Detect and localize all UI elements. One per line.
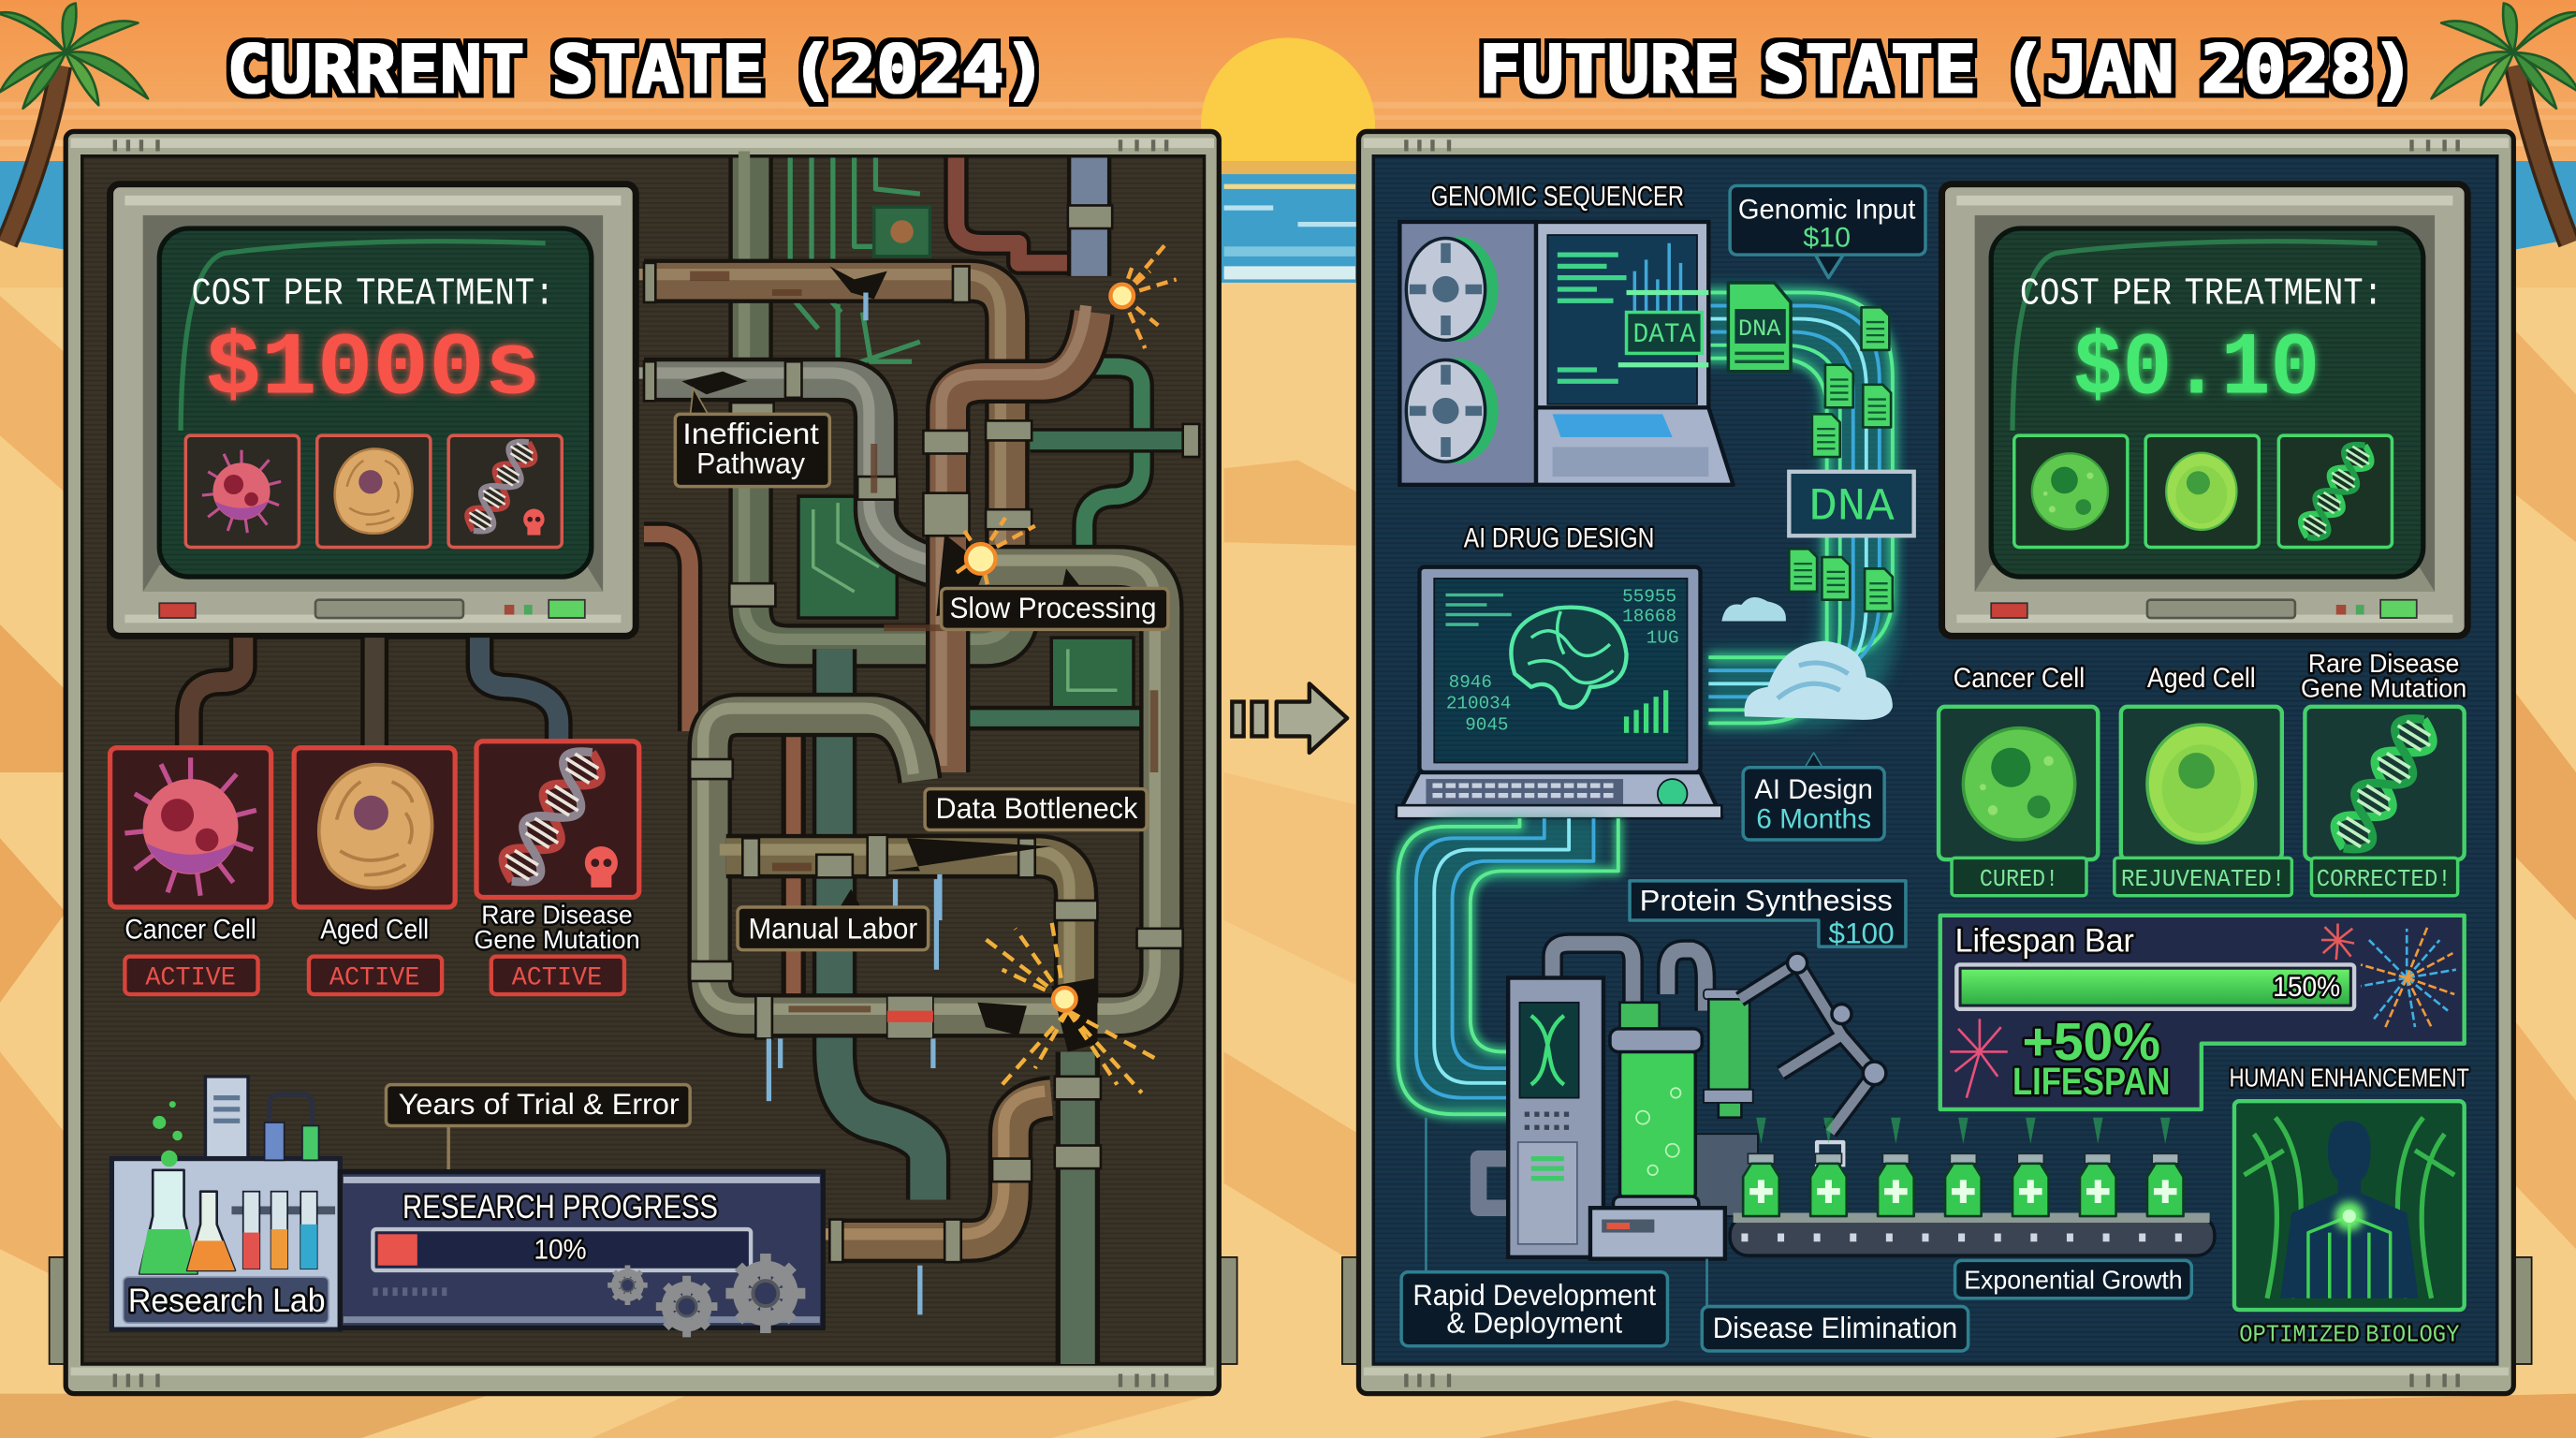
heading: genomic sequencer: GENOMIC SEQUENCER xyxy=(1431,181,1684,212)
callout: protein synthesis: $100 xyxy=(1828,917,1895,950)
panel: future state xyxy=(1342,131,2532,1394)
right palm tree xyxy=(2432,4,2576,243)
card: cancer cell active xyxy=(110,748,271,994)
card: rare disease active xyxy=(474,741,640,994)
card: cancer cell active: ACTIVE xyxy=(145,963,236,993)
plus 50 percent: +50% xyxy=(2023,1012,2160,1071)
title: future state: FUTURE STATE (JAN 2028) xyxy=(1479,31,2415,108)
research lab: Research Lab xyxy=(128,1283,326,1319)
callout: AI design xyxy=(1743,753,1884,840)
cost label: COST PER TREATMENT: xyxy=(2020,273,2383,316)
connector pipes to cells xyxy=(189,638,559,748)
card: aged cell rejuvenated: REJUVENATED! xyxy=(2121,865,2285,893)
left palm tree xyxy=(0,4,148,243)
lifespan panel xyxy=(1940,916,2465,1109)
AI laptop: 9045 xyxy=(1465,714,1509,735)
sky background xyxy=(0,0,2576,181)
optimized biology caption: OPTIMIZED BIOLOGY xyxy=(2239,1320,2460,1348)
AI laptop: 18668 xyxy=(1622,607,1676,627)
sequencer machine xyxy=(1399,222,1734,485)
lifespan word: LIFESPAN xyxy=(2012,1060,2170,1103)
setting sun xyxy=(1201,37,1375,212)
circuit traces xyxy=(790,158,1134,710)
callout: protein synthesis xyxy=(1630,881,1906,950)
card: cancer cell cured xyxy=(1939,663,2098,896)
DNA document xyxy=(1728,283,1791,372)
callout: slow processing: Slow Processing xyxy=(949,591,1157,624)
heading: human enhancement: HUMAN ENHANCEMENT xyxy=(2230,1063,2469,1092)
callout: inefficient pathway xyxy=(675,388,829,487)
card: rare disease corrected xyxy=(2301,649,2466,896)
genomic data stream xyxy=(1701,292,1893,723)
AI laptop: 210034 xyxy=(1446,694,1511,714)
callout: genomic input xyxy=(1730,185,1925,278)
screen icons xyxy=(2014,435,2392,548)
spark burst: middle pipe xyxy=(953,518,1035,592)
arrow: current to future xyxy=(1232,683,1347,753)
spark burst: broken pipe top xyxy=(1110,243,1177,348)
AI laptop xyxy=(1397,567,1721,818)
monitor: cost 1000s xyxy=(110,184,636,636)
cost value: $0.10 xyxy=(2073,320,2320,420)
title: current state: CURRENT STATE (2024) xyxy=(227,31,1046,108)
callout: genomic input: Genomic Input xyxy=(1738,194,1916,225)
monitor: cost 0.10 xyxy=(1942,184,2467,636)
research progress bar xyxy=(340,1172,823,1328)
research progress bar: 10% xyxy=(534,1235,587,1266)
robot arm xyxy=(1740,953,1886,1167)
research progress bar: RESEARCH PROGRESS xyxy=(402,1189,718,1225)
pipes network xyxy=(637,151,1199,1364)
callout: years of trial and error xyxy=(386,1085,690,1170)
AI laptop: 8946 xyxy=(1449,672,1492,693)
screen icons xyxy=(185,434,562,548)
callout: years of trial and error: Years of Trial & Error xyxy=(399,1087,680,1121)
callout: manual labor: Manual Labor xyxy=(748,911,917,945)
DNA label: DNA xyxy=(1808,481,1895,534)
card: aged cell active: Aged Cell xyxy=(320,914,429,945)
card: rare disease active: ACTIVE xyxy=(512,963,602,993)
fireworks xyxy=(1950,924,2456,1098)
DNA document: DNA xyxy=(1738,317,1781,343)
AI laptop: 55955 xyxy=(1622,586,1676,607)
gears xyxy=(607,1254,805,1337)
callout: slow processing xyxy=(942,568,1168,629)
cost label: COST PER TREATMENT: xyxy=(191,273,554,316)
laptop to lab data stream xyxy=(1398,818,1618,1114)
card: cancer cell cured: Cancer Cell xyxy=(1954,663,2085,694)
small data files xyxy=(1789,307,1893,611)
callout: data bottleneck: Data Bottleneck xyxy=(936,791,1138,825)
data chip xyxy=(1627,313,1702,353)
callout: inefficient pathway: Inefficient xyxy=(682,417,819,450)
callout: protein synthesis: Protein Synthesiss xyxy=(1640,884,1893,917)
card: rare disease active: Rare Disease xyxy=(481,901,633,930)
card: aged cell active: ACTIVE xyxy=(329,963,419,993)
callout: AI design: 6 Months xyxy=(1756,804,1871,835)
card: rare disease active: Gene Mutation xyxy=(474,925,640,954)
panel: current state xyxy=(50,131,1237,1394)
sea xyxy=(0,161,2576,292)
callout: rapid development: Rapid Development xyxy=(1412,1278,1656,1312)
card: aged cell active xyxy=(294,748,455,994)
data chip: DATA xyxy=(1633,318,1695,350)
callout: inefficient pathway: Pathway xyxy=(696,447,805,480)
icon: glowing brain xyxy=(1511,608,1627,708)
callout: manual labor xyxy=(738,889,929,950)
heading: AI drug design: AI DRUG DESIGN xyxy=(1464,523,1654,554)
callout: disease elimination: Disease Elimination xyxy=(1713,1311,1957,1344)
card: rare disease corrected: Gene Mutation xyxy=(2301,673,2466,702)
callout: rapid development: & Deployment xyxy=(1446,1306,1622,1340)
DNA label xyxy=(1789,472,1914,536)
card: rare disease corrected: Rare Disease xyxy=(2308,649,2459,678)
AI laptop: 1UG xyxy=(1647,627,1679,648)
cost value: $1000s xyxy=(205,320,540,420)
card: aged cell rejuvenated: Aged Cell xyxy=(2147,663,2256,694)
card: rare disease corrected: CORRECTED! xyxy=(2317,865,2452,893)
human enhancement figure xyxy=(2234,1101,2465,1310)
lifespan bar xyxy=(1956,964,2354,1009)
callout: exponential growth: Exponential Growth xyxy=(1964,1265,2183,1294)
callout: disease elimination xyxy=(1702,1259,1969,1351)
lifespan bar: 150% xyxy=(2273,972,2340,1003)
card: cancer cell cured: CURED! xyxy=(1980,865,2058,893)
bio lab: console and tanks xyxy=(1479,944,1758,1259)
clouds xyxy=(1721,597,1893,720)
callout: genomic input: $10 xyxy=(1803,222,1851,253)
callout: rapid development xyxy=(1401,1118,1667,1346)
callout: AI design: AI Design xyxy=(1754,774,1873,805)
card: aged cell rejuvenated xyxy=(2115,663,2291,896)
research lab xyxy=(111,1077,340,1329)
lifespan heading: Lifespan Bar xyxy=(1955,922,2134,959)
spark burst: lower pipe xyxy=(983,920,1158,1093)
card: cancer cell active: Cancer Cell xyxy=(124,914,256,945)
pipe cracks and leaks xyxy=(681,266,1097,1314)
conveyor with vials xyxy=(1730,1118,2215,1255)
